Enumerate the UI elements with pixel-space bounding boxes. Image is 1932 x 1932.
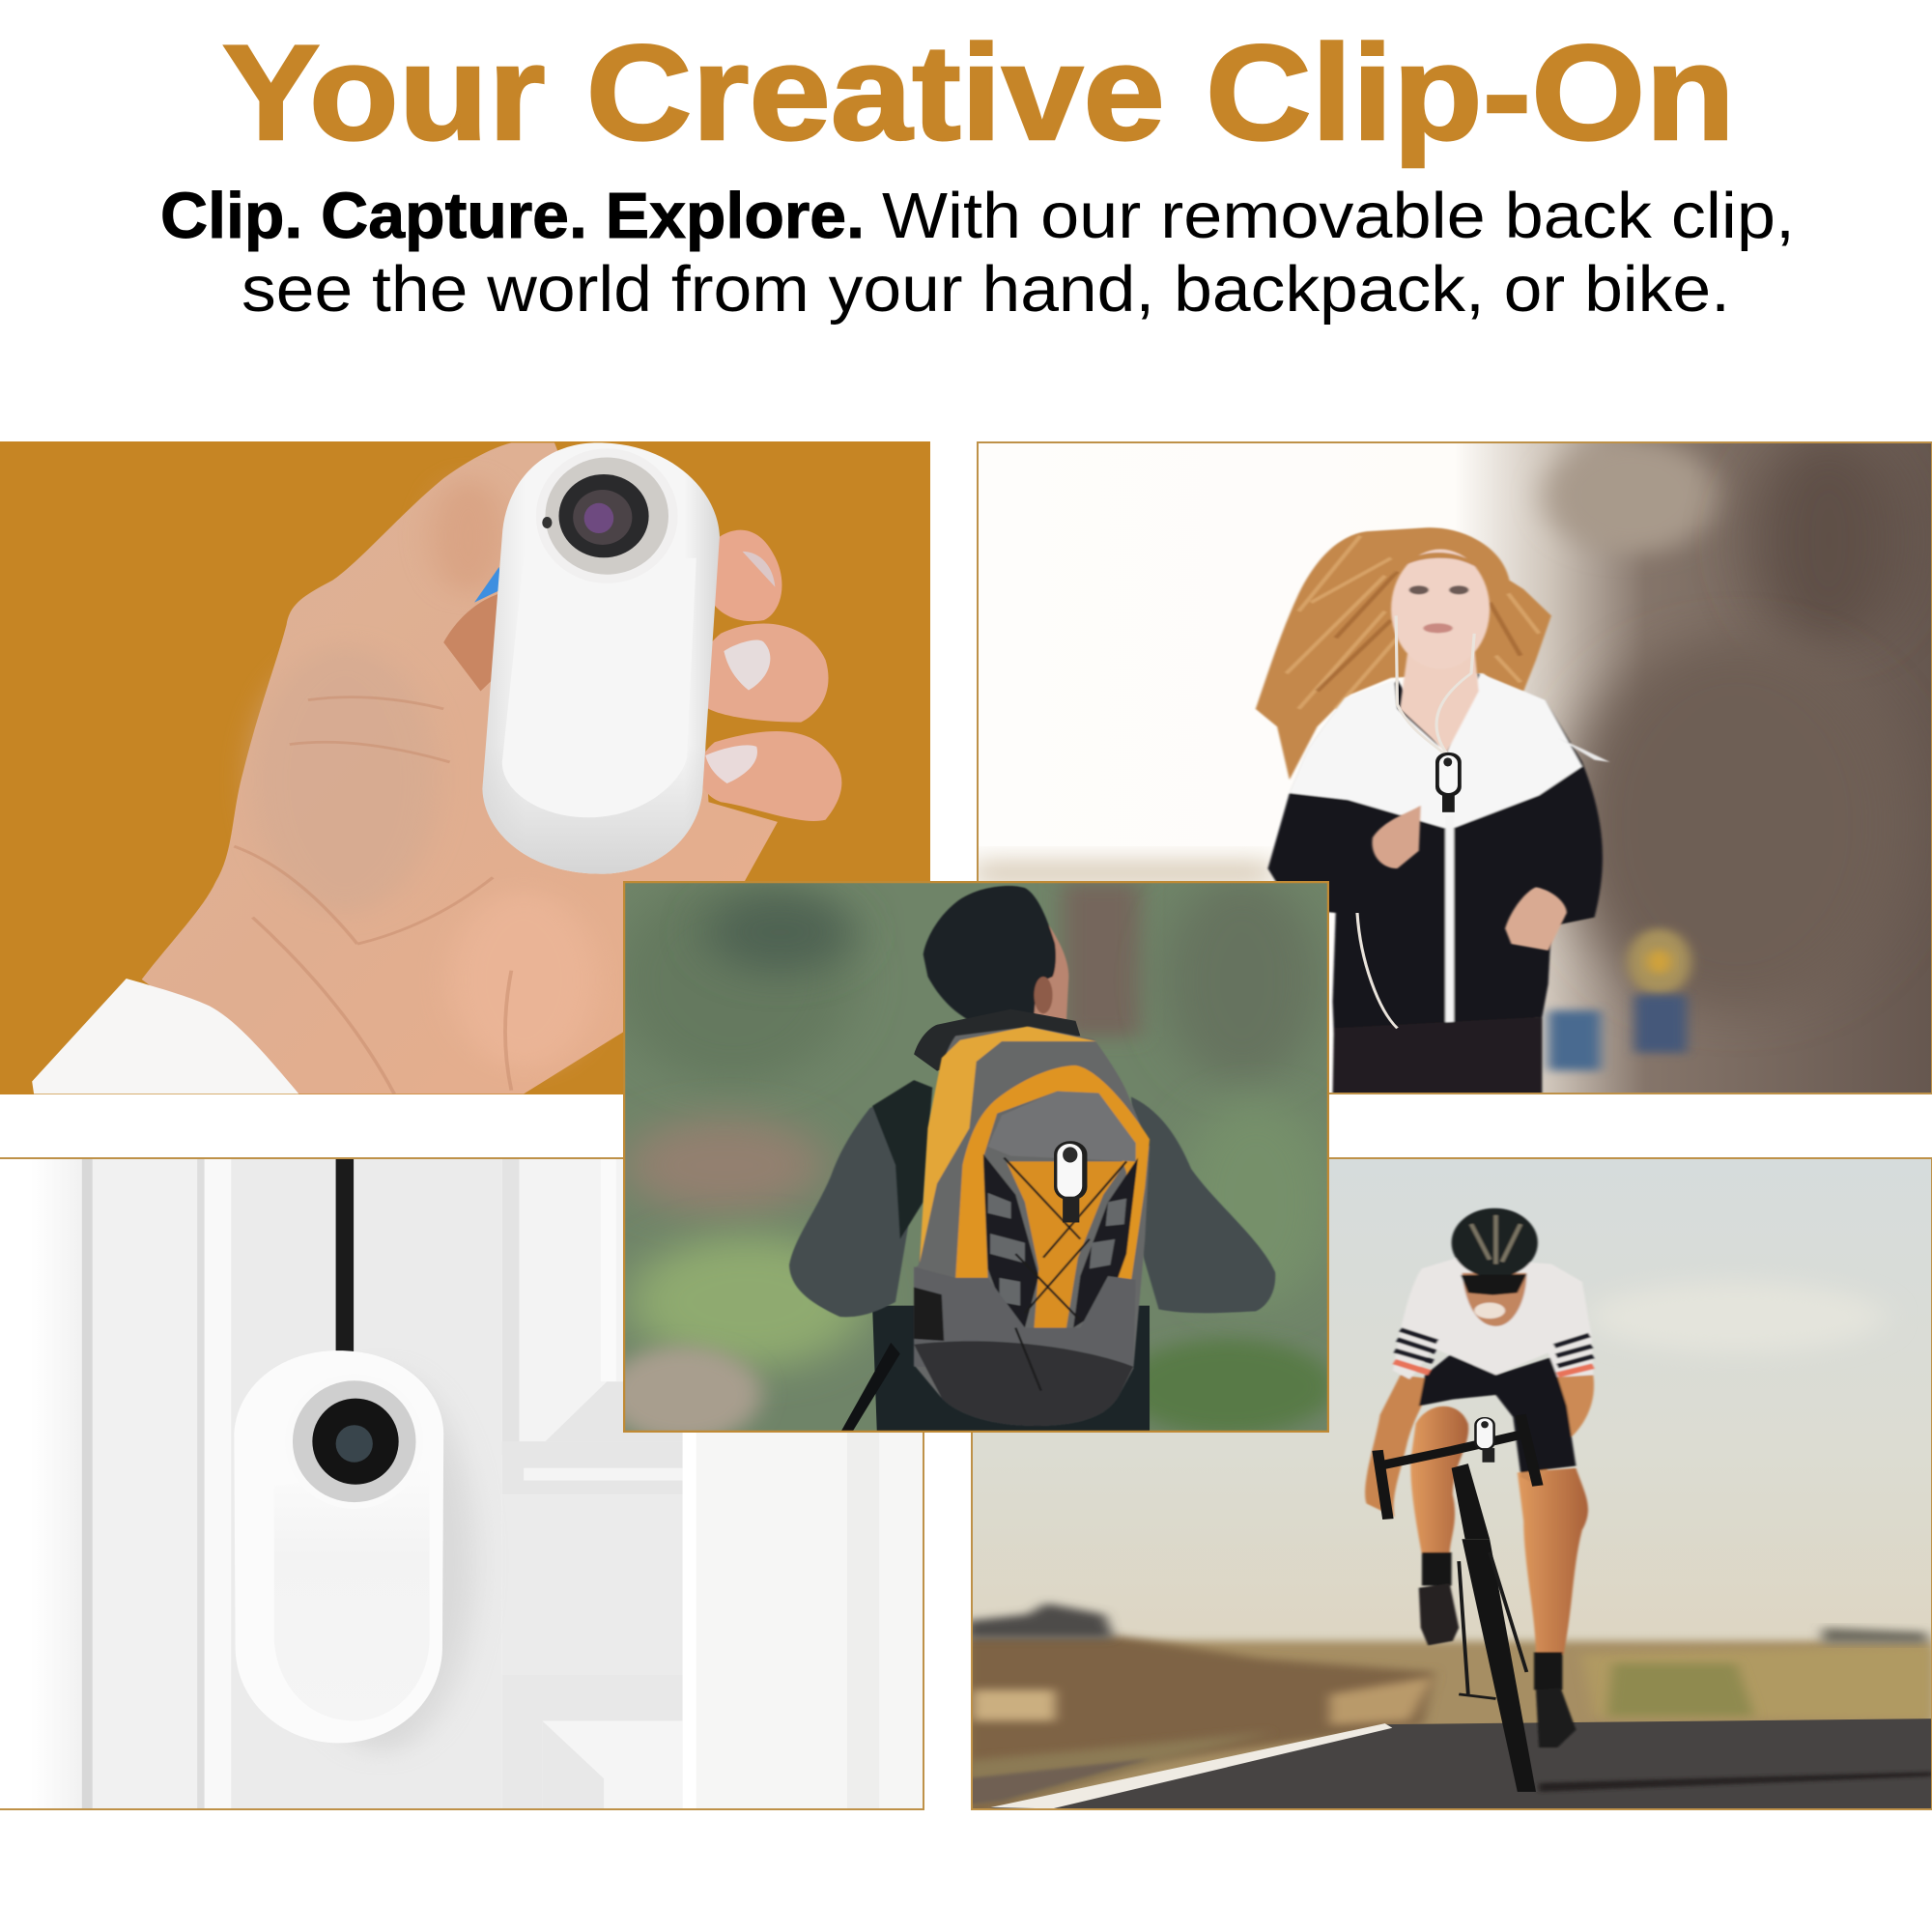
panel frame [972,1158,1932,1809]
bicycle [1378,1415,1538,1792]
straps [840,1343,900,1434]
backpack [914,1027,1150,1426]
panel frame [624,882,1328,1432]
earphone cables [1357,615,1474,1028]
hood and collar [914,1009,1080,1071]
man's head [923,886,1068,1025]
cord [336,1157,354,1352]
clip camera on handlebar [1474,1417,1495,1463]
hand [142,442,841,1094]
panel frame [978,442,1932,1094]
clip camera on backpack [1054,1141,1087,1222]
title: Your Creative Clip-On [222,16,1735,168]
road and landscape [966,1282,1932,1818]
hair [1256,527,1551,780]
panel: cyclist with clip [966,1157,1932,1818]
shirt cuff [32,979,298,1094]
panel: camera held in hand [0,441,930,1094]
shadow [354,1410,476,1750]
panel frame [0,1158,923,1809]
jacket [1268,673,1610,1099]
hands [1372,806,1567,951]
subtitle: Clip. Capture. Explore. [160,180,865,252]
subtitle [160,180,1795,326]
lower jacket [872,1306,1150,1434]
panel: runner with clip [972,434,1932,1099]
camera body [482,442,720,874]
cyclist [1365,1208,1594,1747]
panel: camera hanging on a door [0,1157,924,1810]
subtitle: see the world from your hand, backpack, or bike. [242,253,1730,326]
face and neck [1391,550,1490,753]
clip camera on jacket [1435,753,1462,812]
door panels [31,1157,924,1809]
panel: hiker with backpack (centre overlay) [605,877,1334,1442]
blurred foliage [605,877,1334,1442]
camera body [234,1350,443,1743]
subtitle: With our removable back clip, [882,180,1795,252]
blurred trees and signs [972,434,1909,1070]
arms [789,1080,1275,1317]
